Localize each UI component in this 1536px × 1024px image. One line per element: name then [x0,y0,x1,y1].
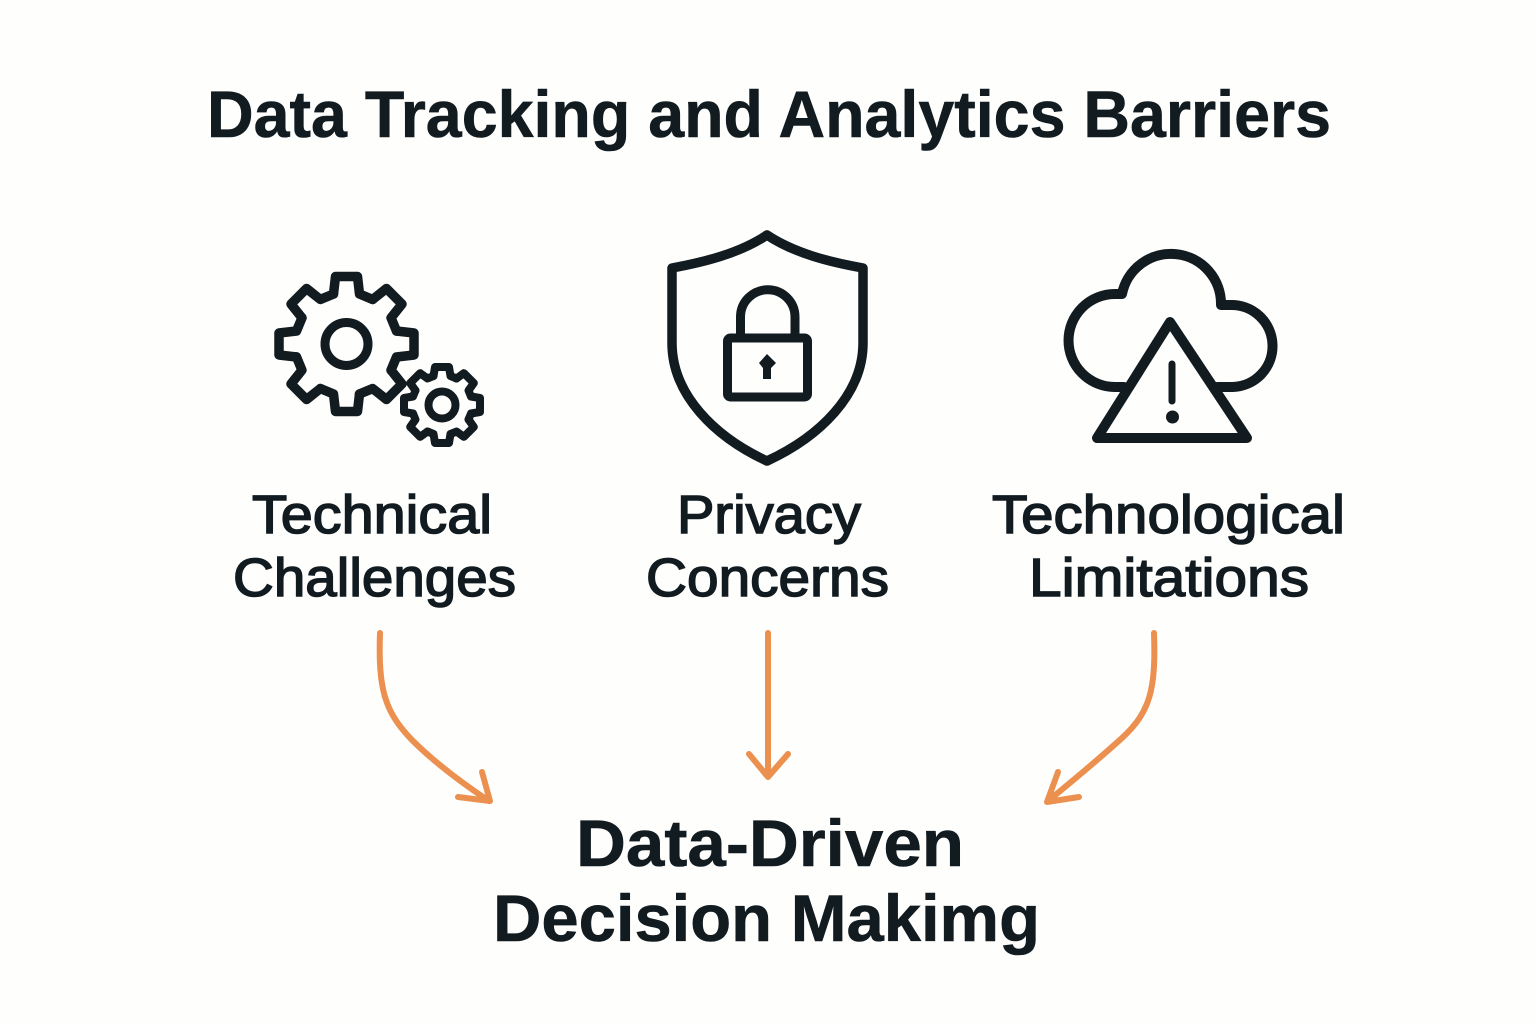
icon: cloud with warning triangle [1069,254,1273,438]
conclusion heading: Decision Makimg [493,881,1040,955]
cloud outline [1069,254,1273,387]
conclusion heading: Data-Driven [576,806,964,880]
exclamation dot [1166,410,1179,424]
padlock shackle [740,290,795,335]
label: technical challenges: Challenges [233,548,516,608]
icon: gears [279,276,480,443]
arrow: left curved [380,633,490,801]
exclamation stroke [1168,364,1176,401]
padlock body [728,338,808,397]
padlock keyhole [759,354,776,379]
label: technological limitations: Technological [992,485,1345,545]
label: technological limitations: Limitations [1029,548,1309,608]
label: privacy concerns: Privacy [677,485,861,545]
icon: large gear [279,276,414,412]
label: technical challenges [233,485,516,608]
arrow: right curved [1047,633,1154,802]
icon: shield with padlock [672,235,863,461]
label: technological limitations [992,485,1345,608]
icon: small gear [404,367,480,443]
label: privacy concerns: Concerns [646,548,889,608]
conclusion heading [493,806,1040,955]
arrow: centre straight [749,633,788,777]
title: Data Tracking and Analytics Barriers [207,77,1331,151]
warning triangle [1097,322,1247,438]
shield outline [672,235,863,461]
label: technical challenges: Technical [252,485,492,545]
label: privacy concerns [646,485,889,608]
